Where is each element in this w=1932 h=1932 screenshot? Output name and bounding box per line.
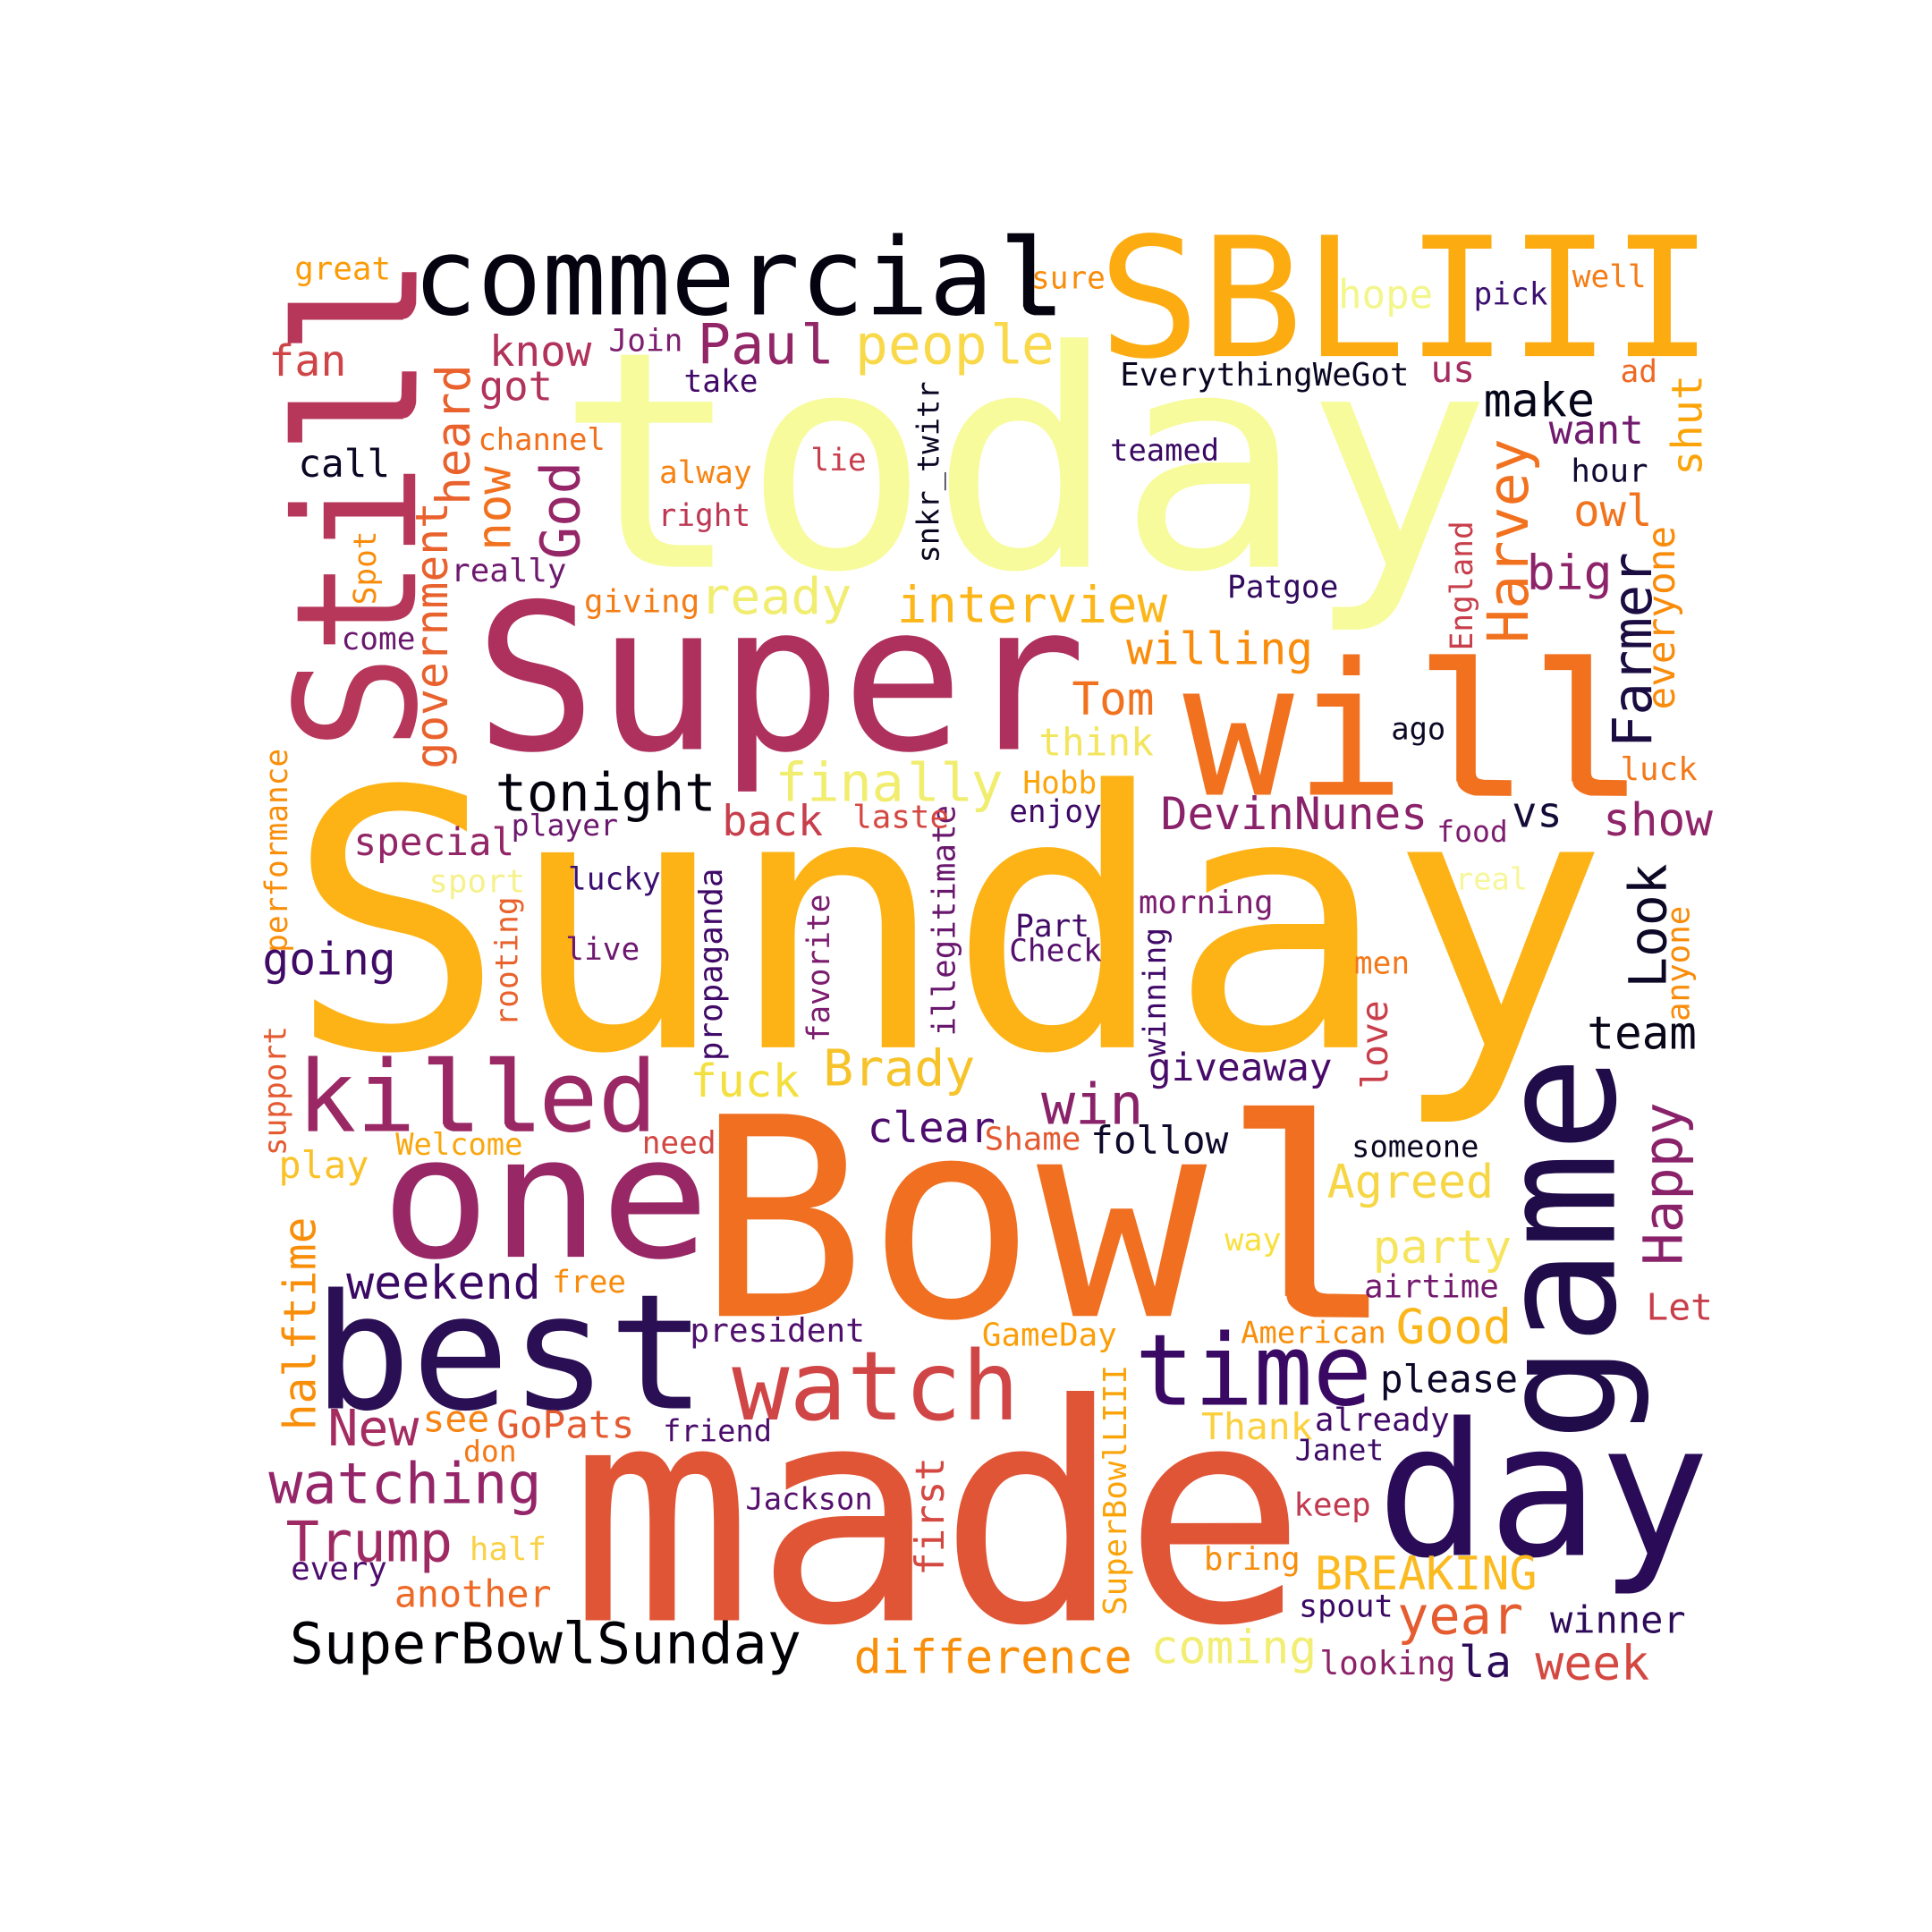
word: Trump: Trump — [286, 1509, 453, 1574]
word: bring: bring — [1204, 1541, 1301, 1578]
word: EverythingWeGot: EverythingWeGot — [1120, 357, 1409, 394]
word: time: time — [1135, 1313, 1372, 1428]
word: people: people — [855, 313, 1055, 381]
word: another: another — [394, 1572, 552, 1615]
word: Agreed: Agreed — [1327, 1156, 1494, 1209]
word: don: don — [463, 1434, 517, 1469]
word: please: please — [1380, 1358, 1518, 1402]
word: week: week — [1535, 1636, 1649, 1691]
word: got: got — [479, 363, 553, 411]
word: interview: interview — [897, 577, 1168, 635]
word: win: win — [1041, 1071, 1143, 1137]
word: best: best — [313, 1259, 707, 1446]
word: SBLIII: SBLIII — [1097, 202, 1714, 396]
word: lucky: lucky — [568, 862, 661, 898]
word: well: well — [1572, 259, 1647, 295]
word: now: now — [467, 466, 521, 551]
word: Brady: Brady — [823, 1040, 975, 1098]
word: day: day — [1377, 1383, 1710, 1598]
word: make: make — [1484, 375, 1595, 428]
word: first: first — [908, 1457, 953, 1576]
word: Jackson: Jackson — [745, 1482, 873, 1517]
word: Sunday: Sunday — [286, 717, 1609, 1132]
word: halftime: halftime — [275, 1217, 326, 1430]
word: party: party — [1373, 1221, 1512, 1275]
word: clear: clear — [868, 1104, 996, 1153]
word: support: support — [258, 1026, 294, 1156]
word: New: New — [327, 1400, 419, 1458]
word: morning: morning — [1139, 885, 1274, 921]
word: live: live — [565, 932, 640, 968]
word: Look: Look — [1617, 863, 1678, 988]
word: Still: Still — [260, 264, 469, 750]
word: Let: Let — [1646, 1285, 1713, 1328]
word: rooting: rooting — [490, 896, 526, 1027]
word: Patgoe: Patgoe — [1227, 570, 1338, 606]
word: keep: keep — [1293, 1487, 1371, 1523]
word: come: come — [342, 622, 415, 657]
word: Shame: Shame — [985, 1121, 1080, 1157]
word: game: game — [1467, 1055, 1653, 1442]
word: lie: lie — [810, 443, 867, 479]
word: God: God — [530, 462, 592, 559]
word: England: England — [1445, 521, 1480, 650]
word: president: president — [690, 1312, 865, 1350]
word: way: way — [1224, 1222, 1282, 1258]
word: GameDay: GameDay — [982, 1317, 1117, 1353]
word: watch: watch — [732, 1332, 1020, 1443]
word: every: every — [291, 1551, 387, 1588]
word: luck: luck — [1620, 751, 1698, 788]
word: Part: Part — [1015, 909, 1089, 945]
word: call: call — [298, 442, 390, 487]
word: Happy: Happy — [1632, 1102, 1695, 1266]
word: Tom: Tom — [1072, 674, 1155, 726]
word: willing: willing — [1126, 623, 1313, 675]
word: special: special — [353, 820, 514, 865]
word: player: player — [512, 808, 618, 843]
word: winning: winning — [1138, 928, 1174, 1057]
word: alway: alway — [659, 455, 752, 491]
word: Good: Good — [1396, 1299, 1512, 1355]
word: today: today — [555, 286, 1492, 638]
word: already: already — [1315, 1402, 1450, 1438]
word: vs: vs — [1512, 789, 1563, 837]
word: fuck: fuck — [690, 1055, 800, 1108]
word: free: free — [552, 1265, 626, 1301]
word: Paul: Paul — [698, 311, 832, 381]
word: Welcome: Welcome — [395, 1127, 522, 1162]
word: going: going — [262, 934, 396, 986]
word: watching: watching — [268, 1451, 541, 1517]
word: Harvey: Harvey — [1475, 438, 1541, 643]
word: everyone: everyone — [1640, 526, 1684, 709]
word: big: big — [1527, 545, 1613, 600]
word: made: made — [569, 1341, 1307, 1692]
word: weekend: weekend — [346, 1257, 541, 1310]
word: think: think — [1038, 720, 1154, 765]
word: play: play — [278, 1143, 369, 1187]
word: great: great — [294, 251, 391, 288]
word: right: right — [658, 498, 750, 534]
word: Hobb: Hobb — [1022, 766, 1097, 801]
word: Janet: Janet — [1295, 1432, 1384, 1467]
word: looking: looking — [1319, 1645, 1455, 1682]
word: want: want — [1549, 408, 1644, 453]
word: difference: difference — [854, 1631, 1132, 1685]
word: anyone: anyone — [1661, 906, 1698, 1021]
word: winner: winner — [1550, 1597, 1686, 1641]
word: channel: channel — [478, 422, 606, 457]
word: half: half — [470, 1531, 547, 1568]
word: Check: Check — [1009, 933, 1102, 969]
word: snkr_twitr: snkr_twitr — [911, 381, 947, 564]
word: sure: sure — [1031, 260, 1106, 296]
word: Thank: Thank — [1201, 1405, 1313, 1448]
word: Spot: Spot — [348, 530, 384, 605]
word: performance: performance — [259, 749, 295, 953]
word: giveaway: giveaway — [1148, 1046, 1332, 1090]
word: commercial: commercial — [412, 216, 1061, 348]
word: heard: heard — [427, 364, 481, 505]
word: us: us — [1430, 348, 1475, 391]
word: killed: killed — [297, 1040, 657, 1163]
word: someone: someone — [1352, 1130, 1479, 1165]
word: government: government — [406, 502, 458, 769]
word: know: know — [489, 327, 592, 377]
word: food: food — [1436, 814, 1508, 849]
word: illegitimate: illegitimate — [927, 805, 963, 1037]
word: one: one — [381, 1101, 710, 1297]
word: friend: friend — [663, 1414, 772, 1449]
word: follow: follow — [1090, 1118, 1229, 1163]
word: laste: laste — [852, 800, 949, 836]
word: will: will — [1182, 623, 1636, 853]
word: fan: fan — [268, 336, 346, 386]
word: real: real — [1455, 862, 1528, 897]
word: men: men — [1354, 945, 1410, 981]
word: see: see — [423, 1398, 489, 1441]
word: sport: sport — [428, 863, 525, 900]
word: coming: coming — [1151, 1622, 1317, 1675]
word: hour: hour — [1571, 453, 1648, 490]
word: back: back — [722, 798, 823, 846]
word: finally: finally — [775, 751, 1004, 818]
word: owl: owl — [1573, 486, 1652, 537]
word: spout: spout — [1299, 1588, 1394, 1624]
word: BREAKING: BREAKING — [1315, 1547, 1538, 1601]
word: SuperBowlSunday: SuperBowlSunday — [290, 1611, 801, 1677]
word: Bowl: Bowl — [696, 1058, 1384, 1402]
word: GoPats: GoPats — [496, 1403, 634, 1448]
word: shut: shut — [1664, 375, 1712, 476]
word: take: take — [684, 364, 758, 400]
word: favorite: favorite — [801, 894, 837, 1042]
word: teamed: teamed — [1110, 433, 1219, 468]
word: propaganda: propaganda — [693, 869, 730, 1061]
word: Super: Super — [474, 561, 1087, 798]
word: year: year — [1397, 1586, 1523, 1647]
word: airtime: airtime — [1364, 1269, 1499, 1306]
word: giving: giving — [584, 584, 699, 621]
word: need: need — [642, 1125, 716, 1161]
word: love: love — [1353, 1000, 1396, 1089]
word: enjoy: enjoy — [1009, 794, 1102, 830]
word: really: really — [451, 553, 566, 589]
word: la: la — [1459, 1637, 1512, 1688]
word: Join: Join — [609, 324, 682, 360]
word: show: show — [1603, 794, 1713, 847]
word: pick: pick — [1474, 276, 1548, 312]
word: SuperBowlLIII: SuperBowlLIII — [1097, 1365, 1134, 1615]
word: hope: hope — [1338, 272, 1433, 318]
word: ad: ad — [1620, 354, 1657, 390]
word: ago: ago — [1391, 712, 1445, 747]
word: Farmer: Farmer — [1602, 552, 1665, 748]
word: tonight: tonight — [496, 762, 716, 823]
word: ready: ready — [699, 568, 852, 626]
word: American: American — [1241, 1316, 1386, 1351]
word: DevinNunes: DevinNunes — [1161, 788, 1428, 840]
word: team: team — [1587, 1007, 1697, 1060]
